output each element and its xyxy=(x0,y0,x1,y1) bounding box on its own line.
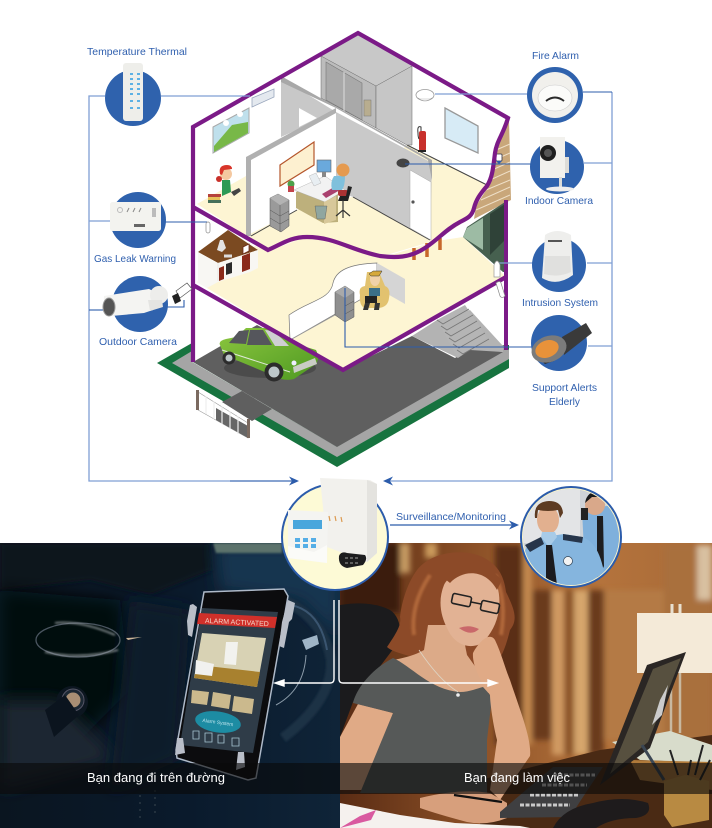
icon: air conditioner sensor xyxy=(252,89,274,107)
icon: smoke detector xyxy=(416,90,434,101)
control panel circle xyxy=(282,478,388,590)
label: support alerts: Support Alerts xyxy=(532,382,597,394)
neck and chest xyxy=(396,625,488,693)
papers xyxy=(612,731,712,763)
landscape picture xyxy=(213,108,249,153)
white arrows to phone and laptop user xyxy=(275,600,497,686)
caption: at work: Bạn đang làm việc xyxy=(464,770,570,785)
label: temperature thermal: Temperature Thermal xyxy=(87,46,187,58)
office chair xyxy=(340,603,400,737)
middle floor xyxy=(197,237,506,370)
desk xyxy=(480,735,712,828)
device: outdoor camera xyxy=(103,276,168,332)
face xyxy=(441,571,499,646)
alarm base unit xyxy=(320,478,377,562)
key fob xyxy=(339,552,366,568)
table lamp xyxy=(637,604,712,733)
red alarm banner xyxy=(197,613,277,628)
connector lines right xyxy=(390,92,612,481)
wooden bookcase xyxy=(340,543,712,755)
reading girl xyxy=(208,165,241,203)
arrow to panel left xyxy=(289,476,299,486)
wall sensor on brick xyxy=(496,154,502,164)
stairs xyxy=(437,305,489,357)
arrow to guards xyxy=(390,520,519,530)
label: outdoor camera: Outdoor Camera xyxy=(99,336,177,348)
laptop xyxy=(500,652,686,818)
window xyxy=(445,108,478,153)
connector lines dark left xyxy=(89,222,292,481)
device: fire alarm xyxy=(527,67,583,123)
door xyxy=(410,170,431,240)
elevator block xyxy=(321,32,412,145)
hair back xyxy=(387,553,515,656)
phone with alarm app xyxy=(175,589,295,780)
necklace xyxy=(419,650,458,692)
woman arm left xyxy=(340,704,393,790)
filing cabinet upper floor xyxy=(270,194,289,232)
device: indoor camera xyxy=(530,137,584,194)
device: temperature thermal xyxy=(105,63,161,126)
red alarm banner: ALARM ACTIVATED xyxy=(205,618,269,628)
bottom photo: driving in a car xyxy=(0,543,340,828)
upper floor xyxy=(197,145,487,257)
device: gas leak warning xyxy=(110,192,166,248)
connector lines dark right xyxy=(345,92,612,347)
partition walls xyxy=(246,76,432,240)
teal alarm button xyxy=(194,708,242,736)
keypad xyxy=(288,510,328,563)
lower hand with pen xyxy=(420,791,507,823)
kitchen xyxy=(198,230,258,288)
teal alarm button: Alarm System xyxy=(202,718,234,728)
device: support alert button xyxy=(528,315,592,371)
arrow to panel right xyxy=(383,476,393,486)
connector lines left xyxy=(89,96,292,481)
purple house outline xyxy=(193,33,508,370)
icon: fire extinguisher xyxy=(418,127,426,152)
caption: on the road: Bạn đang đi trên đường xyxy=(87,770,225,785)
male guard xyxy=(525,501,604,585)
old man in armchair xyxy=(360,271,390,310)
device: intrusion system xyxy=(532,231,586,292)
bottom photo: working in the office xyxy=(340,543,712,828)
label: intrusion system: Intrusion System xyxy=(522,297,598,309)
label: elderly: Elderly xyxy=(549,396,581,408)
brick wall xyxy=(474,120,511,219)
label: gas leak warning: Gas Leak Warning xyxy=(94,253,176,265)
ground floor walls xyxy=(195,280,505,360)
office desk and worker xyxy=(288,160,352,224)
paper on desk xyxy=(340,803,530,828)
curved partition and cabinet xyxy=(289,263,405,340)
car xyxy=(220,328,318,382)
icon: dome camera xyxy=(396,158,410,168)
garden glass window xyxy=(463,202,505,272)
gray shirt xyxy=(353,658,492,793)
hand and forearm xyxy=(473,637,530,800)
caption band xyxy=(0,763,712,794)
icon: door sensors xyxy=(206,222,505,298)
female guard xyxy=(581,493,619,583)
label: surveillance: Surveillance/Monitoring xyxy=(396,511,506,523)
guards circle xyxy=(520,487,624,593)
glasses xyxy=(451,593,500,614)
orange pillars xyxy=(414,238,440,260)
wall board xyxy=(280,142,314,186)
gate xyxy=(196,390,250,438)
pencil holder xyxy=(664,745,710,827)
small outdoor camera on house xyxy=(172,283,192,304)
label: indoor camera: Indoor Camera xyxy=(525,195,593,207)
label: fire alarm: Fire Alarm xyxy=(532,50,579,62)
desk telephone xyxy=(553,799,649,828)
ground plot xyxy=(157,310,509,467)
